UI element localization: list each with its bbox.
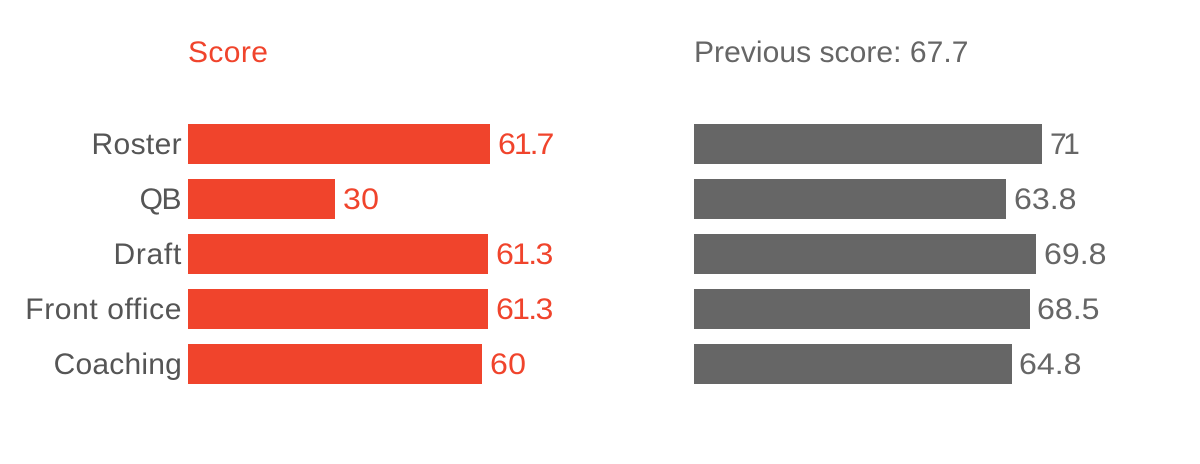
value: QB score: 30 bbox=[343, 183, 379, 216]
row: Draft bbox=[113, 234, 1106, 274]
label: QB: QB bbox=[140, 183, 180, 216]
bar: Coaching previous bbox=[694, 344, 1012, 384]
value: Front office score: 61.3 bbox=[496, 293, 552, 326]
value: Roster previous: 71 bbox=[1050, 128, 1076, 161]
value: Draft score: 61.3 bbox=[496, 238, 552, 271]
value: Roster score: 61.7 bbox=[498, 128, 552, 161]
value: Draft previous: 69.8 bbox=[1044, 238, 1106, 271]
bar: Front office score bbox=[188, 289, 488, 329]
value: Front office previous: 68.5 bbox=[1037, 293, 1099, 326]
label: Coaching: Coaching bbox=[54, 348, 182, 381]
row: Coaching bbox=[54, 344, 1081, 384]
bar: QB score bbox=[188, 179, 335, 219]
heading: Previous score: Previous score: 67.7 bbox=[694, 36, 968, 69]
bar: Coaching score bbox=[188, 344, 482, 384]
bar: Roster score bbox=[188, 124, 490, 164]
heading: Score: Score bbox=[188, 36, 268, 69]
bar: Draft score bbox=[188, 234, 488, 274]
value: Coaching previous: 64.8 bbox=[1019, 348, 1081, 381]
row: QB bbox=[140, 179, 1076, 219]
row: Roster bbox=[92, 124, 1078, 164]
value: QB previous: 63.8 bbox=[1014, 183, 1076, 216]
bar: QB previous bbox=[694, 179, 1006, 219]
value: Coaching score: 60 bbox=[490, 348, 526, 381]
row: Front office bbox=[25, 289, 1099, 329]
bar: Roster previous bbox=[694, 124, 1042, 164]
label: Roster: Roster bbox=[92, 128, 182, 161]
label: Front office: Front office bbox=[25, 293, 182, 326]
bar: Front office previous bbox=[694, 289, 1030, 329]
bar: Draft previous bbox=[694, 234, 1036, 274]
label: Draft: Draft bbox=[113, 238, 182, 271]
